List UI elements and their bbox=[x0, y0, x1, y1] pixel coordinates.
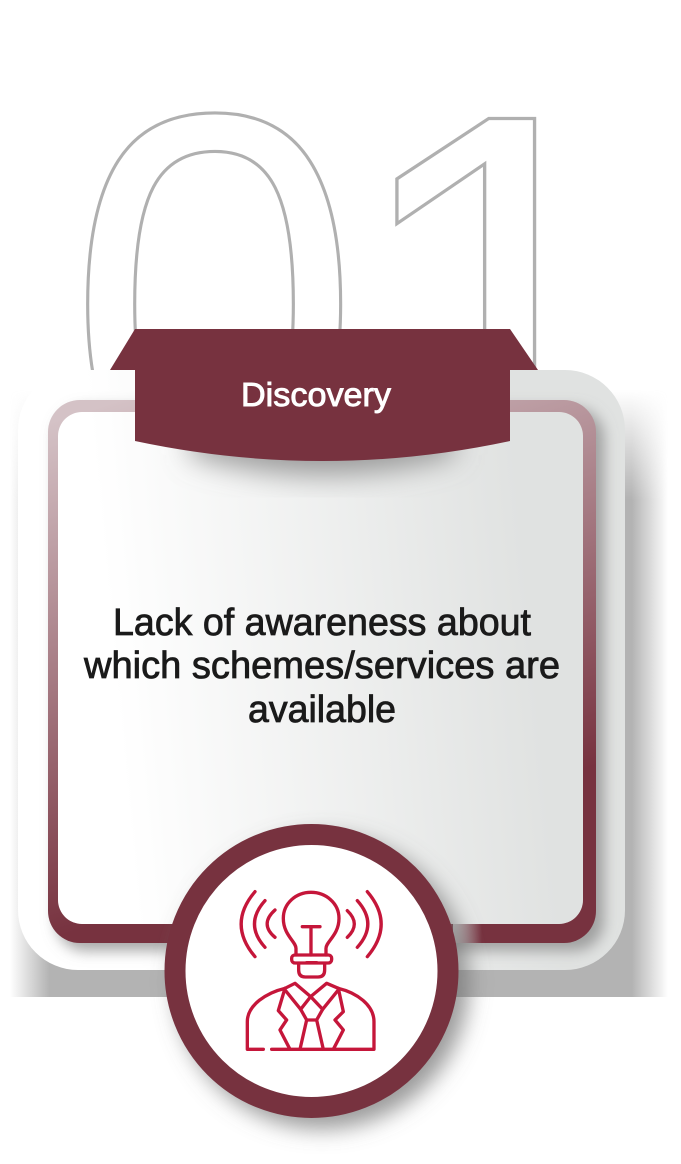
icon badge circle bbox=[175, 834, 448, 1108]
body text: available bbox=[248, 689, 396, 731]
inner frame shadow bbox=[56, 408, 604, 951]
big outlined number 01: 1 bbox=[343, 2, 657, 605]
icon: signal waves bbox=[241, 892, 381, 957]
inner framed panel bbox=[48, 400, 596, 943]
card drop shadow bbox=[10, 378, 668, 997]
banner label: Discovery bbox=[241, 376, 392, 413]
frame fade beside circle bbox=[453, 924, 482, 943]
body text bbox=[83, 602, 560, 731]
big outlined number 01: 0 bbox=[67, 2, 361, 605]
body text: which schemes/services are bbox=[83, 645, 560, 687]
icon: bulb bbox=[283, 892, 339, 977]
icon: suit body bbox=[247, 983, 374, 1049]
banner shadow bbox=[190, 430, 455, 475]
banner: Discovery bbox=[110, 329, 538, 461]
big outlined number 01 bbox=[86, 111, 536, 370]
body text: Lack of awareness about bbox=[113, 602, 531, 644]
circle shadow bbox=[175, 835, 469, 1129]
outer card bbox=[18, 370, 625, 970]
icon: person with light bulb head bbox=[241, 892, 381, 1049]
